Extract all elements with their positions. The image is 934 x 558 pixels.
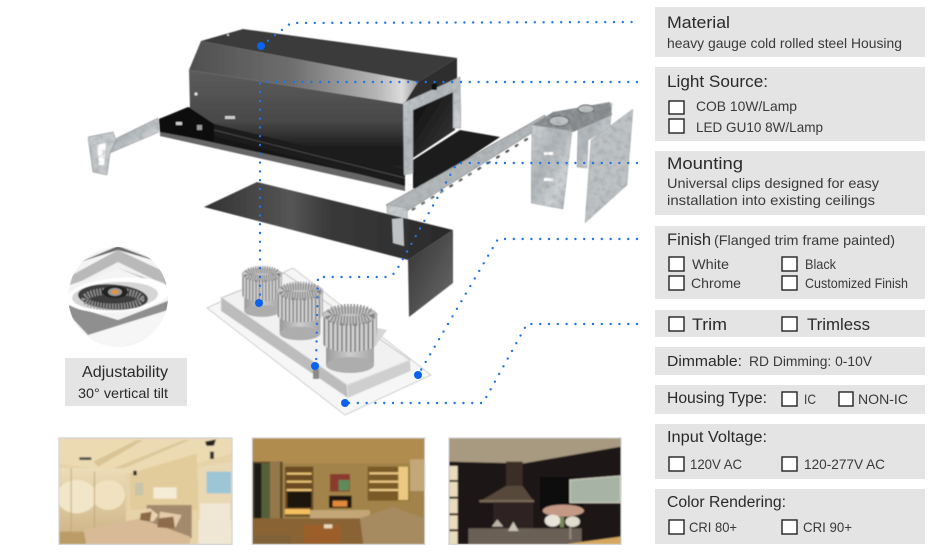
panel: input voltage: 120V AC — [690, 456, 742, 472]
long mounting bar — [386, 115, 546, 252]
panel: mounting: Universal clips designed for easy — [667, 175, 879, 191]
panel: color rendering: CRI 90+ — [803, 519, 852, 535]
panel: housing type: IC — [804, 391, 816, 407]
photo: bedroom — [57, 437, 233, 545]
adjustability label: 30° vertical tilt — [78, 385, 168, 401]
callout lines — [255, 22, 637, 407]
panel: housing type — [655, 385, 925, 414]
panel: color rendering — [655, 489, 925, 544]
trim plate — [207, 268, 431, 415]
housing illustration — [88, 29, 633, 317]
lamp modules — [242, 268, 387, 373]
panel: dimmable: RD Dimming: 0-10V — [749, 353, 873, 369]
tray — [159, 107, 405, 191]
panel: input voltage: 120-277V AC — [804, 456, 885, 472]
junction box — [531, 102, 633, 223]
panel: light source: COB 10W/Lamp — [696, 98, 797, 114]
panel: finish: Finish — [667, 230, 711, 249]
black flap — [204, 182, 453, 317]
panel: trim — [655, 310, 925, 337]
panel: finish: Customized Finish — [805, 275, 908, 291]
panel: dimmable: Dimmable: — [667, 353, 742, 370]
panel: light source — [655, 67, 925, 141]
panel: mounting: installation into existing ceilings — [667, 192, 875, 208]
photo: living room — [252, 437, 425, 545]
adjustability label — [65, 358, 187, 406]
adjustability label: Adjustability — [82, 364, 168, 381]
panel: color rendering: CRI 80+ — [689, 519, 737, 535]
panel: mounting — [655, 151, 925, 215]
panel: input voltage: Input Voltage: — [667, 429, 767, 446]
panel: finish — [655, 226, 925, 299]
panel: material: heavy gauge cold rolled steel Housing — [667, 35, 902, 51]
fixture frame walls — [221, 297, 411, 398]
panel: material: Material — [667, 13, 730, 32]
panel: finish: Black — [805, 256, 837, 272]
adjustability inset circle — [68, 247, 168, 347]
panel: input voltage — [655, 424, 925, 479]
panel: housing type: Housing Type: — [667, 390, 767, 407]
panel: finish: (Flanged trim frame painted) — [714, 232, 895, 248]
panel: trim: Trim — [692, 315, 727, 334]
panel: light source: Light Source: — [667, 72, 768, 91]
panel: material — [655, 7, 925, 57]
left mounting bar clip — [88, 118, 159, 175]
housing box — [189, 29, 457, 186]
panel: color rendering: Color Rendering: — [667, 494, 786, 511]
light fixture — [207, 268, 431, 415]
panel: finish: White — [692, 256, 729, 272]
panel: mounting: Mounting — [667, 154, 743, 173]
panel: trim: Trimless — [807, 315, 870, 334]
panel: dimmable — [655, 347, 925, 375]
panel: light source: LED GU10 8W/Lamp — [696, 119, 823, 135]
panel: finish: Chrome — [691, 275, 741, 291]
panel: housing type: NON-IC — [858, 391, 908, 407]
housing open end — [403, 58, 500, 190]
photo: kitchen — [448, 437, 622, 545]
